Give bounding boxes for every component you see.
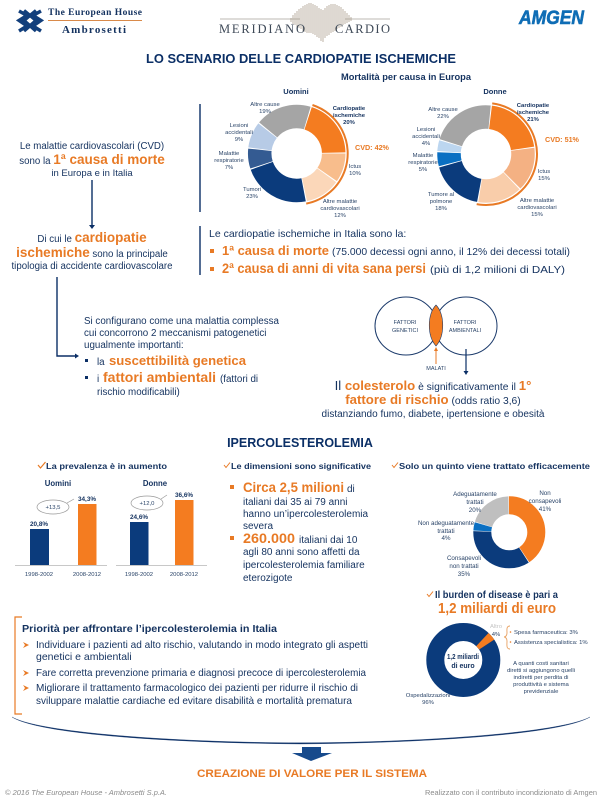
panel: priorities: Migliorare il trattamento farmacologico dei pazienti per ridurre il rischio di [36, 682, 358, 694]
logo: Meridiano Cardio: MERIDIANO [219, 22, 305, 36]
donut chart: women: polmone [430, 199, 453, 205]
donut chart: women: respiratorie [408, 160, 438, 166]
text block: cholesterol risk factor: fattore di rischio (odds ratio 3,6) [345, 392, 521, 407]
text block: ischemic heart disease in Italy: (più di 1,2 milioni di DALY) [430, 265, 565, 276]
donut chart: treatment: non trattati [449, 563, 479, 570]
donut chart: women: 21% [527, 117, 540, 123]
text block: complex disease mechanisms: ugualmente importanti: [84, 340, 184, 351]
panel: burden of disease: Altro [490, 624, 503, 630]
logo: The European House Ambrosetti: The European House [48, 8, 142, 18]
text block: cholesterol risk factor [322, 378, 545, 420]
donut chart: men: 19% [259, 109, 272, 115]
text block: cholesterol risk factor: Il colesterolo è significativamente il 1° [335, 378, 531, 393]
text block: CVD first cause of death: Le malattie cardiovascolari (CVD) [20, 141, 164, 152]
donut chart: women: Tumore al [428, 192, 454, 198]
panel: burden of disease: Il burden of disease è pari a [435, 589, 558, 601]
donut chart: women: Malattie [413, 153, 434, 159]
donut chart: treatment [392, 461, 590, 578]
donut chart: treatment: Adeguatamente [453, 491, 497, 498]
panel: burden of disease: 1,2 miliardi [447, 654, 479, 661]
bar chart: prevalence: 24,6% [130, 514, 148, 521]
text block: dimensions: Circa 2,5 milioni [243, 480, 344, 495]
logo: The European House Ambrosetti [19, 8, 142, 36]
text block: CVD first cause of death: sono la 1ª causa di morte [19, 152, 165, 167]
text block: complex disease mechanisms: i [97, 374, 99, 385]
donut chart: women: Altre malattie [520, 198, 555, 204]
panel: priorities: genetici e ambientali [36, 651, 132, 663]
footer: sponsor note: Realizzato con il contributo incondizionato di Amgen [425, 788, 597, 797]
donut chart: women: 18% [435, 206, 448, 212]
bar chart: prevalence: 36,6% [175, 492, 193, 499]
text block: dimensions: hanno un’ipercolesterolemia [243, 509, 369, 520]
logo: Amgen: AMGEN [518, 8, 585, 29]
panel: priorities: Fare corretta prevenzione primaria e diagnosi precoce di ipercolesterolemia [36, 667, 366, 679]
panel: burden of disease [406, 589, 588, 706]
donut chart: women: 15% [538, 176, 551, 182]
donut chart: treatment: 4% [442, 535, 451, 542]
text block: ischemic heart disease: Di cui le cardiopatie [37, 230, 147, 245]
text block: dimensions: severa [243, 521, 273, 532]
conclusion heading: CREAZIONE DI VALORE PER IL SISTEMA [197, 768, 427, 780]
text block: ischemic heart disease in Italy: 2ª causa di anni di vita sana persi [222, 261, 426, 276]
panel: burden of disease: Assistenza specialistica: 1% [514, 640, 588, 646]
venn diagram: risk factors [375, 297, 497, 375]
donut chart: women: cardiovascolari [517, 205, 557, 211]
donut chart: treatment: Solo un quinto viene trattato efficacemente [399, 461, 590, 471]
bar chart: prevalence: 1998-2002 [125, 572, 153, 578]
text block: ischemic heart disease in Italy: 1ª causa di morte [222, 243, 329, 258]
text block: dimensions: Le dimensioni sono significative [231, 461, 371, 471]
donut chart: men: Altre cause [250, 102, 280, 108]
donut chart: men: 12% [334, 213, 347, 219]
text block: CVD first cause of death: in Europa e in Italia [51, 168, 133, 179]
text block: dimensions: agli 80 anni sono affetti da [243, 547, 360, 558]
panel: burden of disease: di euro [451, 663, 475, 670]
panel: burden of disease: diretti si aggiungono quelli [507, 668, 575, 674]
donut chart: treatment: trattati [466, 499, 484, 506]
donut chart: women: Lesioni [417, 127, 435, 133]
text block: complex disease mechanisms: cui concorrono 2 meccanismi patogenetici [84, 328, 266, 339]
panel: priorities: Individuare i pazienti ad alto rischio, valutando in modo integrato gli aspetti [36, 639, 368, 651]
logo: The European House Ambrosetti: Ambrosetti [62, 24, 126, 36]
donut chart: women: Ictus [538, 169, 550, 175]
arrow: to complex disease [57, 277, 79, 358]
donut chart: men: Uomini [283, 87, 309, 96]
donut chart: men: 10% [349, 171, 362, 177]
donut chart: women: Cardiopatie [517, 103, 550, 109]
donut chart: treatment: trattati [437, 528, 455, 535]
donut chart: women: 4% [422, 141, 431, 147]
text block: dimensions [224, 461, 371, 584]
venn diagram: risk factors: FATTORI [454, 320, 477, 326]
text block: ischemic heart disease [11, 230, 173, 272]
donut chart: treatment: Non [539, 490, 551, 497]
panel: burden of disease: A quanti costi sanitari [513, 661, 569, 667]
bar chart: prevalence: 20,8% [30, 521, 48, 528]
venn diagram: risk factors: FATTORI [394, 320, 417, 326]
bar chart: prevalence: +12,0 [140, 501, 155, 507]
donut chart: women: Donne [483, 87, 507, 96]
text block: complex disease mechanisms: Si configurano come una malattia complessa [84, 316, 280, 327]
donut chart: women: accidentali [412, 134, 440, 140]
donut chart: men: Ictus [349, 164, 361, 170]
venn diagram: risk factors: MALATI [426, 366, 446, 372]
donut chart: men: respiratorie [214, 158, 244, 164]
panel: burden of disease: previdenziale [524, 689, 559, 695]
donut chart: men: 7% [225, 165, 234, 171]
donut chart: treatment: 35% [458, 571, 471, 578]
bar chart: prevalence: La prevalenza è in aumento [46, 461, 167, 471]
panel: burden of disease: Spesa farmaceutica: 3% [514, 630, 579, 636]
donut chart: men: accidentali [225, 130, 253, 136]
donut chart: women: 15% [531, 212, 544, 218]
donut chart: men [214, 87, 390, 219]
panel: priorities [15, 617, 368, 714]
donut chart: women [408, 87, 580, 218]
bar chart: prevalence: 2008-2012 [73, 572, 101, 578]
logo: Meridiano Cardio: CARDIO [335, 22, 390, 36]
donut chart: men: 23% [246, 194, 259, 200]
bar chart: prevalence: 2008-2012 [170, 572, 198, 578]
donut chart: men: Malattie [219, 151, 240, 157]
heading: hypercholesterolemia: IPERCOLESTEROLEMIA [227, 436, 373, 450]
chart heading: mortality by cause: Mortalità per causa in Europa [341, 72, 472, 82]
donut chart: men: 20% [343, 120, 356, 126]
donut chart: treatment: Non adeguatamente [418, 520, 475, 527]
text block: complex disease mechanisms: la [97, 357, 105, 368]
text block: dimensions: di [347, 484, 355, 495]
text block: dimensions: 260.000 [243, 530, 295, 546]
panel: burden of disease: produttività e sistema [513, 682, 570, 688]
donut chart: men: CVD: 42% [355, 143, 390, 152]
venn diagram: risk factors: GENETICI [392, 328, 418, 334]
donut chart: men: ischemiche [333, 113, 366, 119]
donut chart: treatment: consapevoli [529, 498, 561, 505]
text block: ischemic heart disease: ischemiche sono la principale [16, 245, 168, 260]
donut chart: women: 5% [419, 167, 428, 173]
panel: burden of disease: 4% [492, 632, 501, 638]
divider line [199, 104, 201, 275]
text block: ischemic heart disease in Italy: Le cardiopatie ischemiche in Italia sono la: [209, 228, 406, 240]
donut chart: men: Tumori [243, 187, 261, 193]
donut chart: treatment: Consapevoli [447, 555, 481, 562]
text block: complex disease mechanisms: rischio modificabili) [97, 387, 180, 398]
panel: priorities: Priorità per affrontare l’ipercolesterolemia in Italia [22, 624, 277, 635]
bar chart: prevalence: 34,3% [78, 496, 96, 503]
text block: CVD first cause of death [19, 141, 165, 179]
text block: ischemic heart disease in Italy: (75.000 decessi ogni anno, il 12% dei decessi totali) [332, 247, 570, 258]
donut chart: women: 22% [437, 114, 450, 120]
logo: Meridiano Cardio [219, 3, 390, 42]
arrow: CVD to ischemic [89, 180, 95, 229]
panel: burden of disease: indiretti per perdita di [513, 675, 569, 681]
footer: copyright: © 2016 The European House - Ambrosetti S.p.A. [5, 788, 167, 797]
bar chart: prevalence: +13,5 [46, 505, 61, 511]
panel: burden of disease: 96% [422, 700, 435, 706]
panel: burden of disease: 1,2 miliardi di euro [438, 600, 556, 617]
donut chart: women: ischemiche [517, 110, 550, 116]
text block: ischemic heart disease: tipologia di accidente cardiovascolare [11, 261, 173, 272]
text block: cholesterol risk factor: distanziando fumo, diabete, ipertensione e obesità [322, 409, 545, 420]
text block: complex disease mechanisms [84, 316, 280, 398]
donut chart: men: Cardiopatie [333, 106, 366, 112]
bar chart: prevalence: 1998-2002 [25, 572, 53, 578]
bar chart: prevalence [15, 461, 207, 578]
text block: dimensions: italiani dai 35 ai 79 anni [243, 497, 348, 508]
text block: ischemic heart disease in Italy [209, 228, 570, 276]
bar chart: prevalence: Uomini [45, 479, 71, 488]
text block: complex disease mechanisms: suscettibilità genetica [109, 353, 247, 368]
venn diagram: risk factors: AMBIENTALI [449, 328, 482, 334]
donut chart: treatment: 41% [539, 506, 552, 513]
arrow: down [292, 747, 332, 761]
donut chart: treatment: 20% [469, 507, 482, 514]
donut chart: men: cardiovascolari [320, 206, 360, 212]
text block: dimensions: ipercolesterolemia familiare [243, 560, 365, 571]
text block: dimensions: eterozigote [243, 573, 293, 584]
donut chart: men: 9% [235, 137, 244, 143]
bar chart: prevalence: Donne [143, 479, 168, 488]
text block: dimensions: italiani dai 10 [299, 535, 358, 546]
donut chart: women: CVD: 51% [545, 135, 580, 144]
donut chart: women: Altre cause [428, 107, 458, 113]
curved brace [12, 717, 590, 744]
text block: complex disease mechanisms: fattori ambientali [103, 370, 216, 385]
panel: priorities: sviluppare malattie cardiache ed evitare disabilità e mortalità prematura [36, 695, 352, 707]
text block: complex disease mechanisms: (fattori di [220, 374, 258, 385]
donut chart: men: Lesioni [230, 123, 248, 129]
panel: burden of disease: Ospedalizzazioni [406, 693, 450, 699]
donut chart: men: Altre malattie [323, 199, 358, 205]
title: LO SCENARIO DELLE CARDIOPATIE ISCHEMICHE [146, 51, 456, 66]
